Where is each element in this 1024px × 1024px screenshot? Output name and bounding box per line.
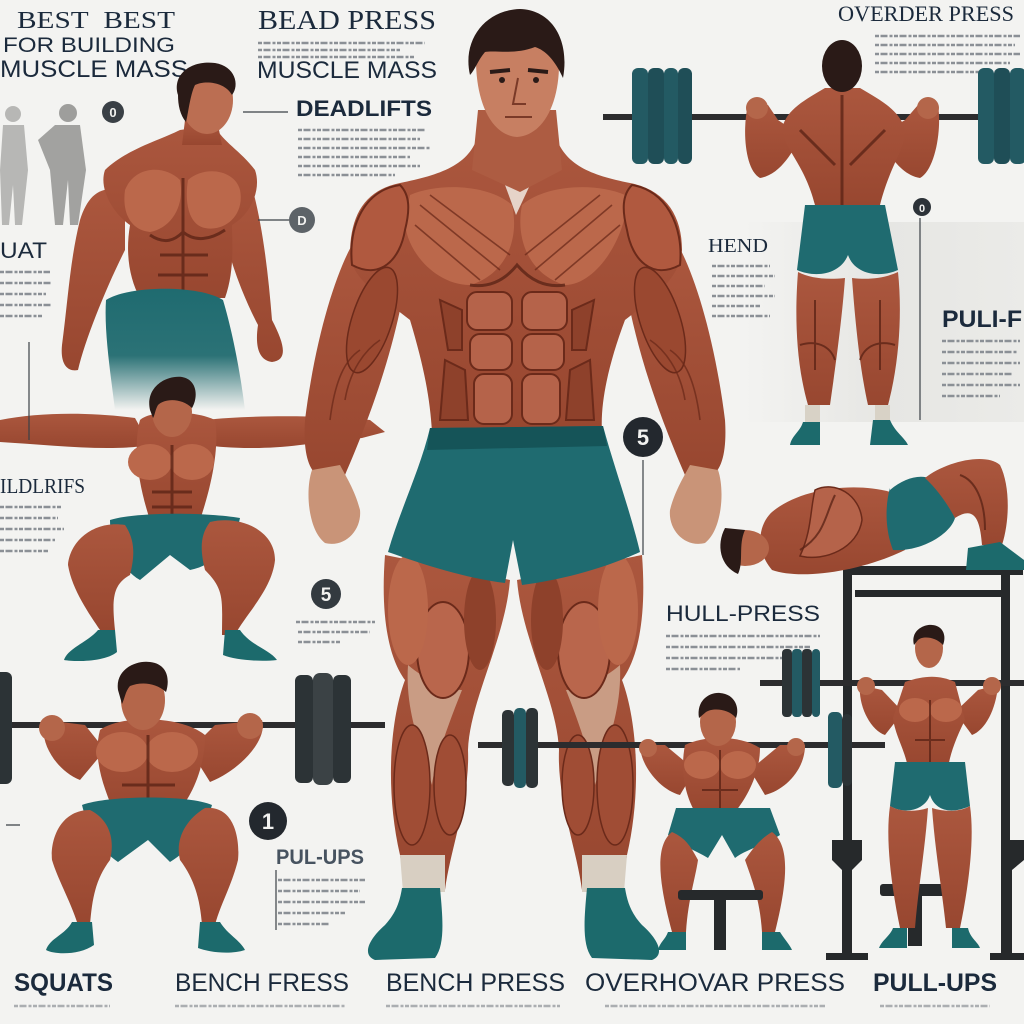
heading: hull-press: HULL-PRESS xyxy=(666,601,820,626)
bottom labels: OVERHOVAR PRESS xyxy=(585,969,845,997)
heading: muscle mass: MUSCLE MASS xyxy=(257,57,437,84)
figure: power rack xyxy=(826,566,1024,960)
main: abs xyxy=(440,292,594,424)
main: waistband xyxy=(427,426,607,450)
badges: 0 xyxy=(109,105,117,120)
bottom labels: BENCH FRESS xyxy=(175,969,349,997)
icon: ghost figures xyxy=(0,104,86,225)
figure: lying bench press xyxy=(720,459,1024,574)
title: MUSCLE MASS xyxy=(0,56,188,83)
main: left arm xyxy=(305,245,402,475)
text block: bead press notes xyxy=(258,43,425,57)
figure: squat with arms out xyxy=(0,377,385,661)
heading: uat: UAT xyxy=(0,238,47,263)
bottom labels: PULL-UPS xyxy=(873,969,997,997)
main: left shoe xyxy=(368,888,442,960)
text block: pulf notes xyxy=(942,341,1020,396)
main: pectorals xyxy=(405,178,626,286)
figure: overhead press back view xyxy=(603,40,1024,445)
text block: hend notes xyxy=(712,266,775,316)
title xyxy=(0,8,188,83)
main: hair xyxy=(468,9,565,78)
main: right hand xyxy=(670,465,722,544)
main: shorts xyxy=(388,426,640,585)
heading: pulf: PULI-F xyxy=(942,306,1022,333)
text block: hull-press notes xyxy=(666,636,820,669)
badges: 5 xyxy=(637,425,649,450)
panel: soft right backdrop xyxy=(745,222,1024,422)
figure: small barbell squat xyxy=(478,693,885,950)
main: head xyxy=(476,38,559,137)
main: neck xyxy=(472,110,562,192)
badges: 0 xyxy=(919,203,925,215)
text block: middle left notes xyxy=(296,622,375,642)
heading: overder press: OVERDER PRESS xyxy=(838,1,1014,26)
text block: overder press notes xyxy=(875,36,1020,72)
figure: standing man upper left xyxy=(62,63,283,410)
badges: 1 xyxy=(262,809,274,834)
text block: deadlifts notes xyxy=(298,130,430,175)
title: FOR BUILDING xyxy=(3,34,175,57)
badges xyxy=(102,101,931,840)
heading: ldlrifs: ILDLRIFS xyxy=(0,474,85,498)
badges: D xyxy=(297,213,307,228)
heading: bead press: BEAD PRESS xyxy=(258,5,436,35)
bottom labels xyxy=(14,969,997,1006)
text block: pul-ups notes xyxy=(278,880,365,924)
main: right shoe xyxy=(585,888,659,960)
bottom labels: BENCH PRESS xyxy=(386,969,565,997)
text block: ldlrifs notes xyxy=(0,507,64,551)
text block: uat notes xyxy=(0,272,52,316)
figure: main muscular man xyxy=(305,9,725,960)
main: left hand xyxy=(308,465,360,544)
title: BEST BEST xyxy=(17,8,175,34)
main: torso xyxy=(350,135,682,432)
heading: deadlifts: DEADLIFTS xyxy=(296,96,432,121)
heading: hend: HEND xyxy=(708,235,768,257)
figure: standing press in rack xyxy=(760,625,1024,948)
leader lines xyxy=(6,112,920,930)
main: right arm xyxy=(628,245,725,475)
main: face xyxy=(490,70,548,117)
heading: pul-ups: PUL-UPS xyxy=(276,846,364,869)
badges: 5 xyxy=(321,585,332,606)
bottom labels: SQUATS xyxy=(14,969,113,997)
main: shoulders xyxy=(330,185,700,420)
figure: barbell squat lower left xyxy=(0,662,385,953)
main: legs xyxy=(384,555,643,892)
